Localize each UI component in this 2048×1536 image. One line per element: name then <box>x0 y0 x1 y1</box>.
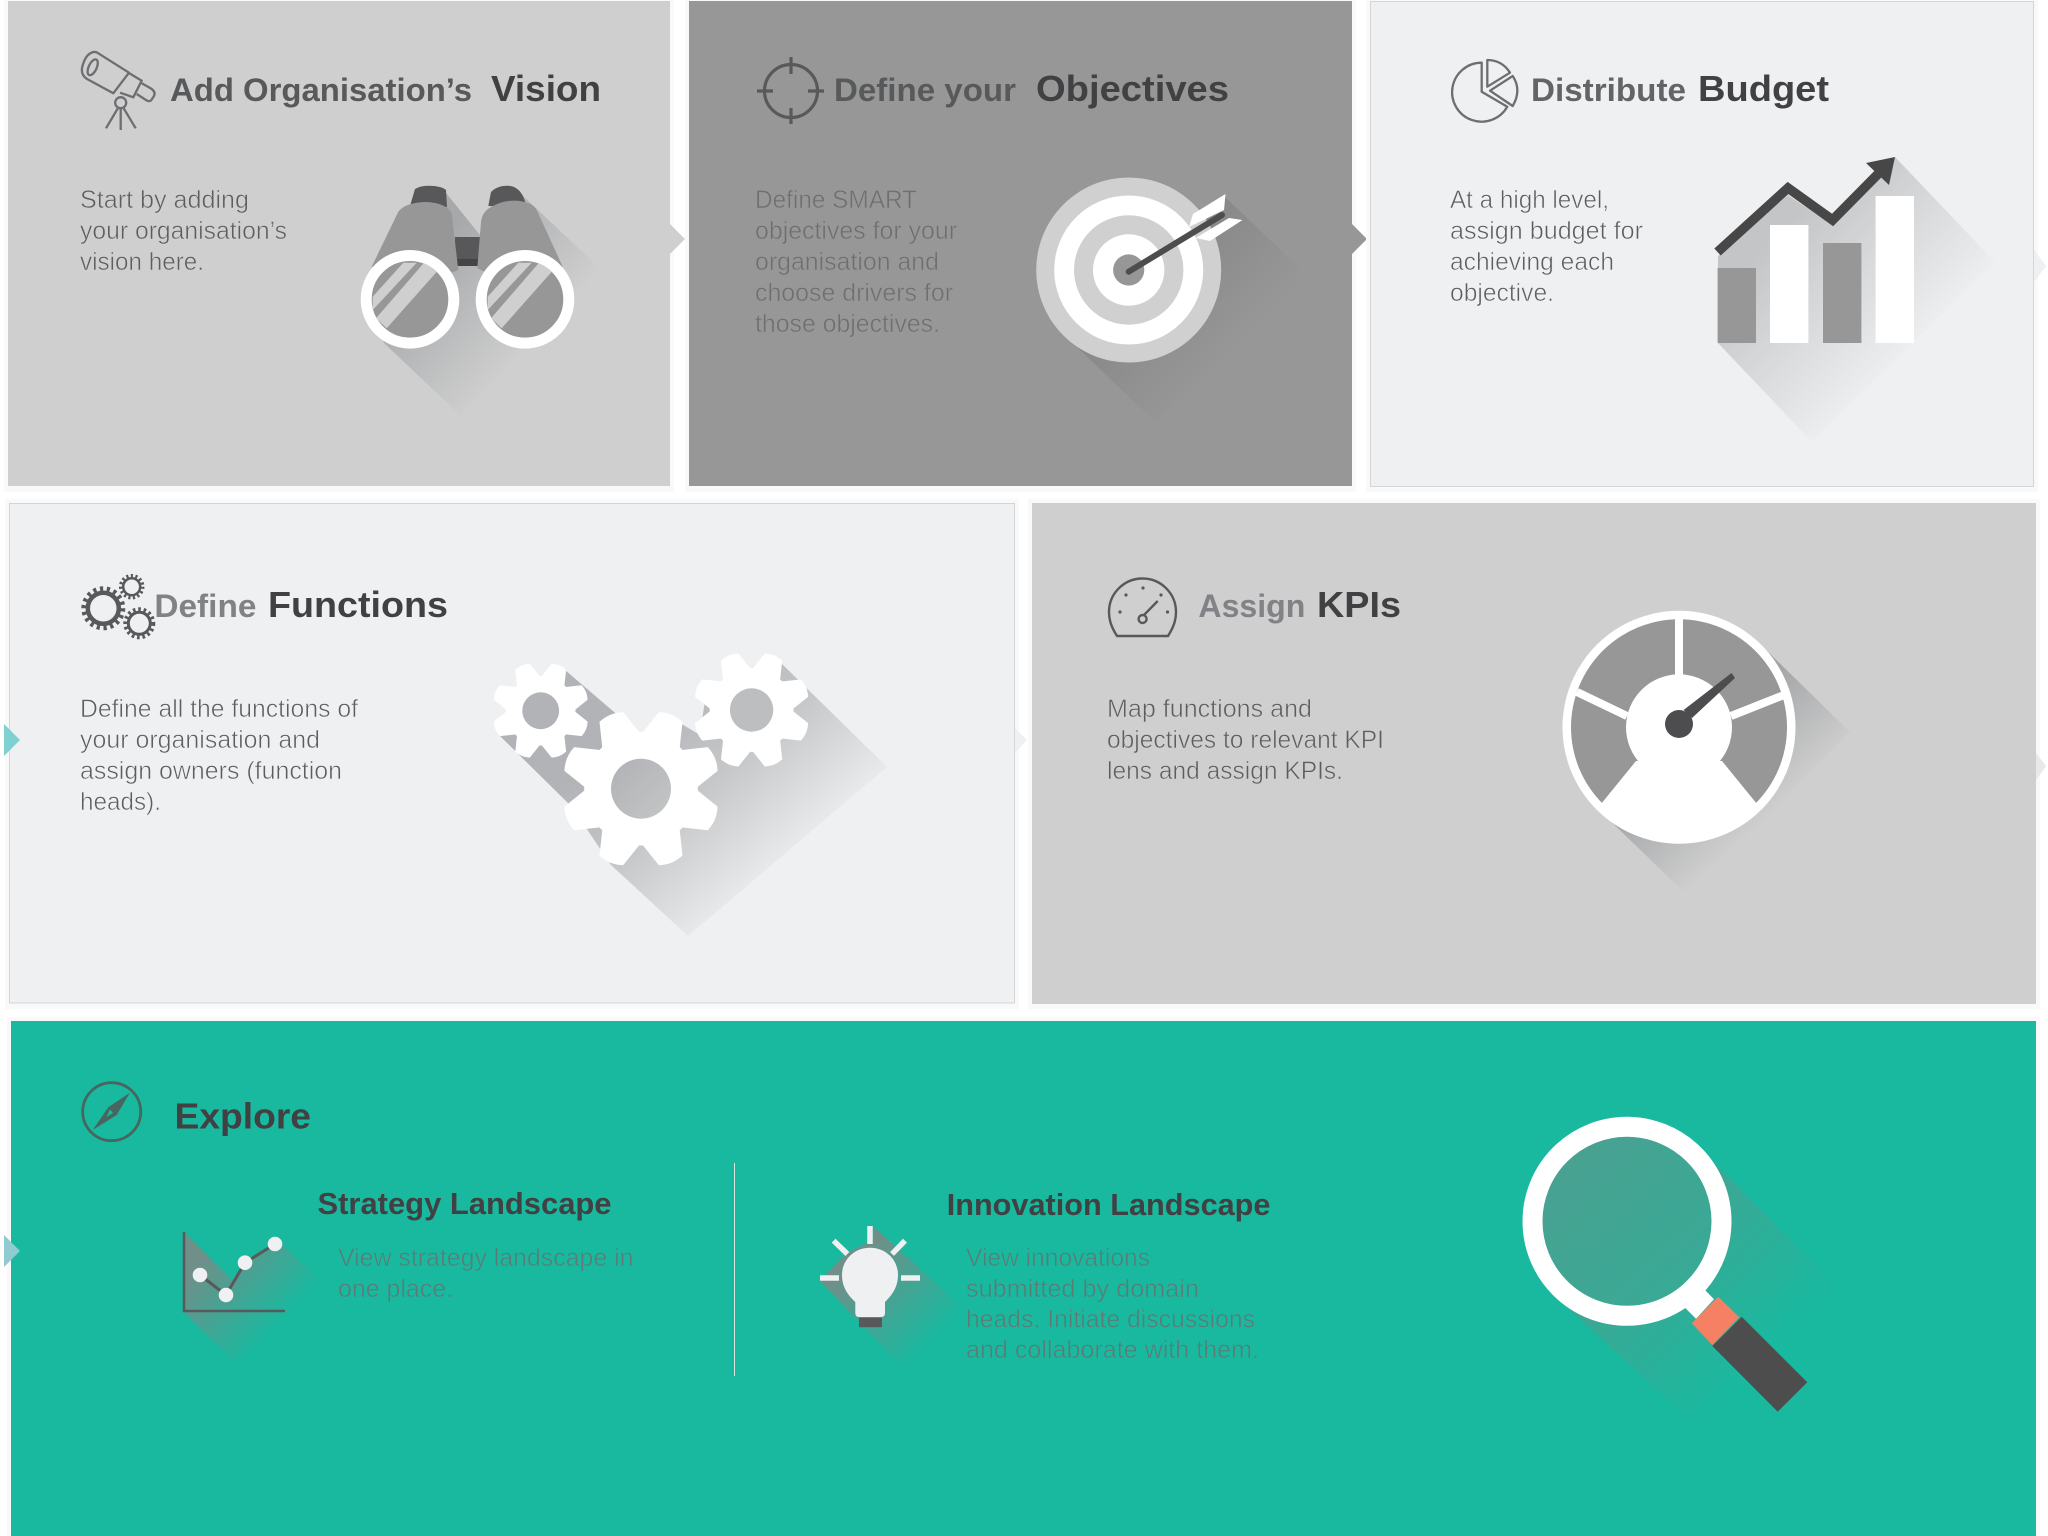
text: vision description: Start by adding <box>80 186 249 214</box>
heading: assign KPIs: Assign <box>1198 588 1305 624</box>
text: innovation description <box>966 1244 1259 1364</box>
arrow: KPIs to explore <box>2036 753 2046 780</box>
heading: distribute budget: Distribute <box>1531 72 1686 108</box>
icon: magnifying glass <box>1532 1127 1837 1427</box>
icon: gauge outline <box>1109 578 1176 636</box>
sub-panel: innovation landscape <box>820 1187 1270 1370</box>
text: innovation description: submitted by domain <box>966 1275 1199 1303</box>
heading: define functions <box>154 584 448 625</box>
text: objectives description: objectives for your <box>755 217 957 245</box>
heading: define your objectives: Objectives <box>1036 68 1229 109</box>
panel: define your objectives <box>685 0 1356 492</box>
heading: innovation landscape: Innovation Landscape <box>947 1187 1270 1222</box>
text: innovation description: View innovations <box>966 1244 1150 1272</box>
heading: assign KPIs: KPIs <box>1317 584 1401 625</box>
heading: add organisation's vision: Add Organisation’s <box>170 72 472 108</box>
text: strategy description: View strategy landscape in <box>338 1244 634 1272</box>
icon: crosshair <box>757 57 824 124</box>
panel: explore <box>7 1017 2040 1536</box>
heading: add organisation's vision: Vision <box>491 68 601 109</box>
text: KPI description: lens and assign KPIs. <box>1107 757 1343 785</box>
text: vision description: vision here. <box>80 248 204 276</box>
arrow: objectives to budget <box>1352 224 1367 254</box>
arrow: into functions <box>4 724 20 756</box>
text: strategy description <box>338 1244 634 1303</box>
text: innovation description: heads. Initiate discussions <box>966 1306 1255 1334</box>
text: objectives description: choose drivers for <box>755 279 953 307</box>
icon: gears outline <box>84 576 153 637</box>
heading: assign KPIs <box>1198 584 1401 625</box>
arrow: budget to next row <box>2034 250 2046 282</box>
icon: pie chart <box>1452 60 1517 122</box>
chart: rising bars with arrow <box>1718 157 1995 442</box>
arrow: functions to KPIs <box>1015 728 1027 753</box>
text: functions description: Define all the functions of <box>80 695 358 723</box>
heading: define your objectives <box>834 68 1229 109</box>
heading: define functions: Define <box>154 588 256 624</box>
panel: add organisation's vision <box>4 0 674 492</box>
text: budget description <box>1450 186 1643 307</box>
icon: compass <box>83 1083 141 1141</box>
icon: binoculars <box>360 186 582 400</box>
text: budget description: assign budget for <box>1450 217 1643 245</box>
icon: telescope <box>82 52 155 130</box>
text: budget description: objective. <box>1450 279 1554 307</box>
text: budget description: achieving each <box>1450 248 1614 276</box>
text: budget description: At a high level, <box>1450 186 1609 214</box>
text: functions description: assign owners (function <box>80 757 342 785</box>
icon: speedometer <box>1562 611 1850 897</box>
text: functions description: your organisation and <box>80 726 320 754</box>
heading: add organisation's vision <box>170 68 601 109</box>
heading: distribute budget: Budget <box>1698 68 1829 109</box>
text: objectives description: Define SMART <box>755 186 917 214</box>
text: innovation description: and collaborate with them. <box>966 1336 1259 1364</box>
icon: line chart <box>184 1232 322 1365</box>
icon: white gears <box>491 650 887 936</box>
heading: define functions: Functions <box>268 584 448 625</box>
text: objectives description <box>755 186 957 338</box>
panel: distribute budget <box>1366 0 2038 492</box>
heading: explore: Explore <box>174 1096 311 1137</box>
heading: strategy landscape: Strategy Landscape <box>318 1186 612 1221</box>
panel: assign KPIs <box>1028 499 2040 1009</box>
arrow: into explore <box>4 1235 20 1267</box>
text: KPI description <box>1107 695 1384 785</box>
text: vision description: your organisation’s <box>80 217 287 245</box>
icon: target with arrow <box>1036 178 1305 422</box>
heading: define your objectives: Define your <box>834 72 1016 108</box>
text: vision description <box>80 186 287 276</box>
icon: light bulb <box>820 1226 965 1370</box>
text: KPI description: objectives to relevant KPI <box>1107 726 1384 754</box>
arrow: vision to objectives <box>670 224 685 254</box>
sub-panel: strategy landscape <box>184 1186 634 1365</box>
text: functions description <box>80 695 358 816</box>
text: KPI description: Map functions and <box>1107 695 1312 723</box>
text: objectives description: organisation and <box>755 248 939 276</box>
heading: distribute budget <box>1531 68 1829 109</box>
text: strategy description: one place. <box>338 1275 453 1303</box>
text: objectives description: those objectives. <box>755 310 940 338</box>
panel: define functions <box>5 499 1019 1009</box>
text: functions description: heads). <box>80 788 161 816</box>
